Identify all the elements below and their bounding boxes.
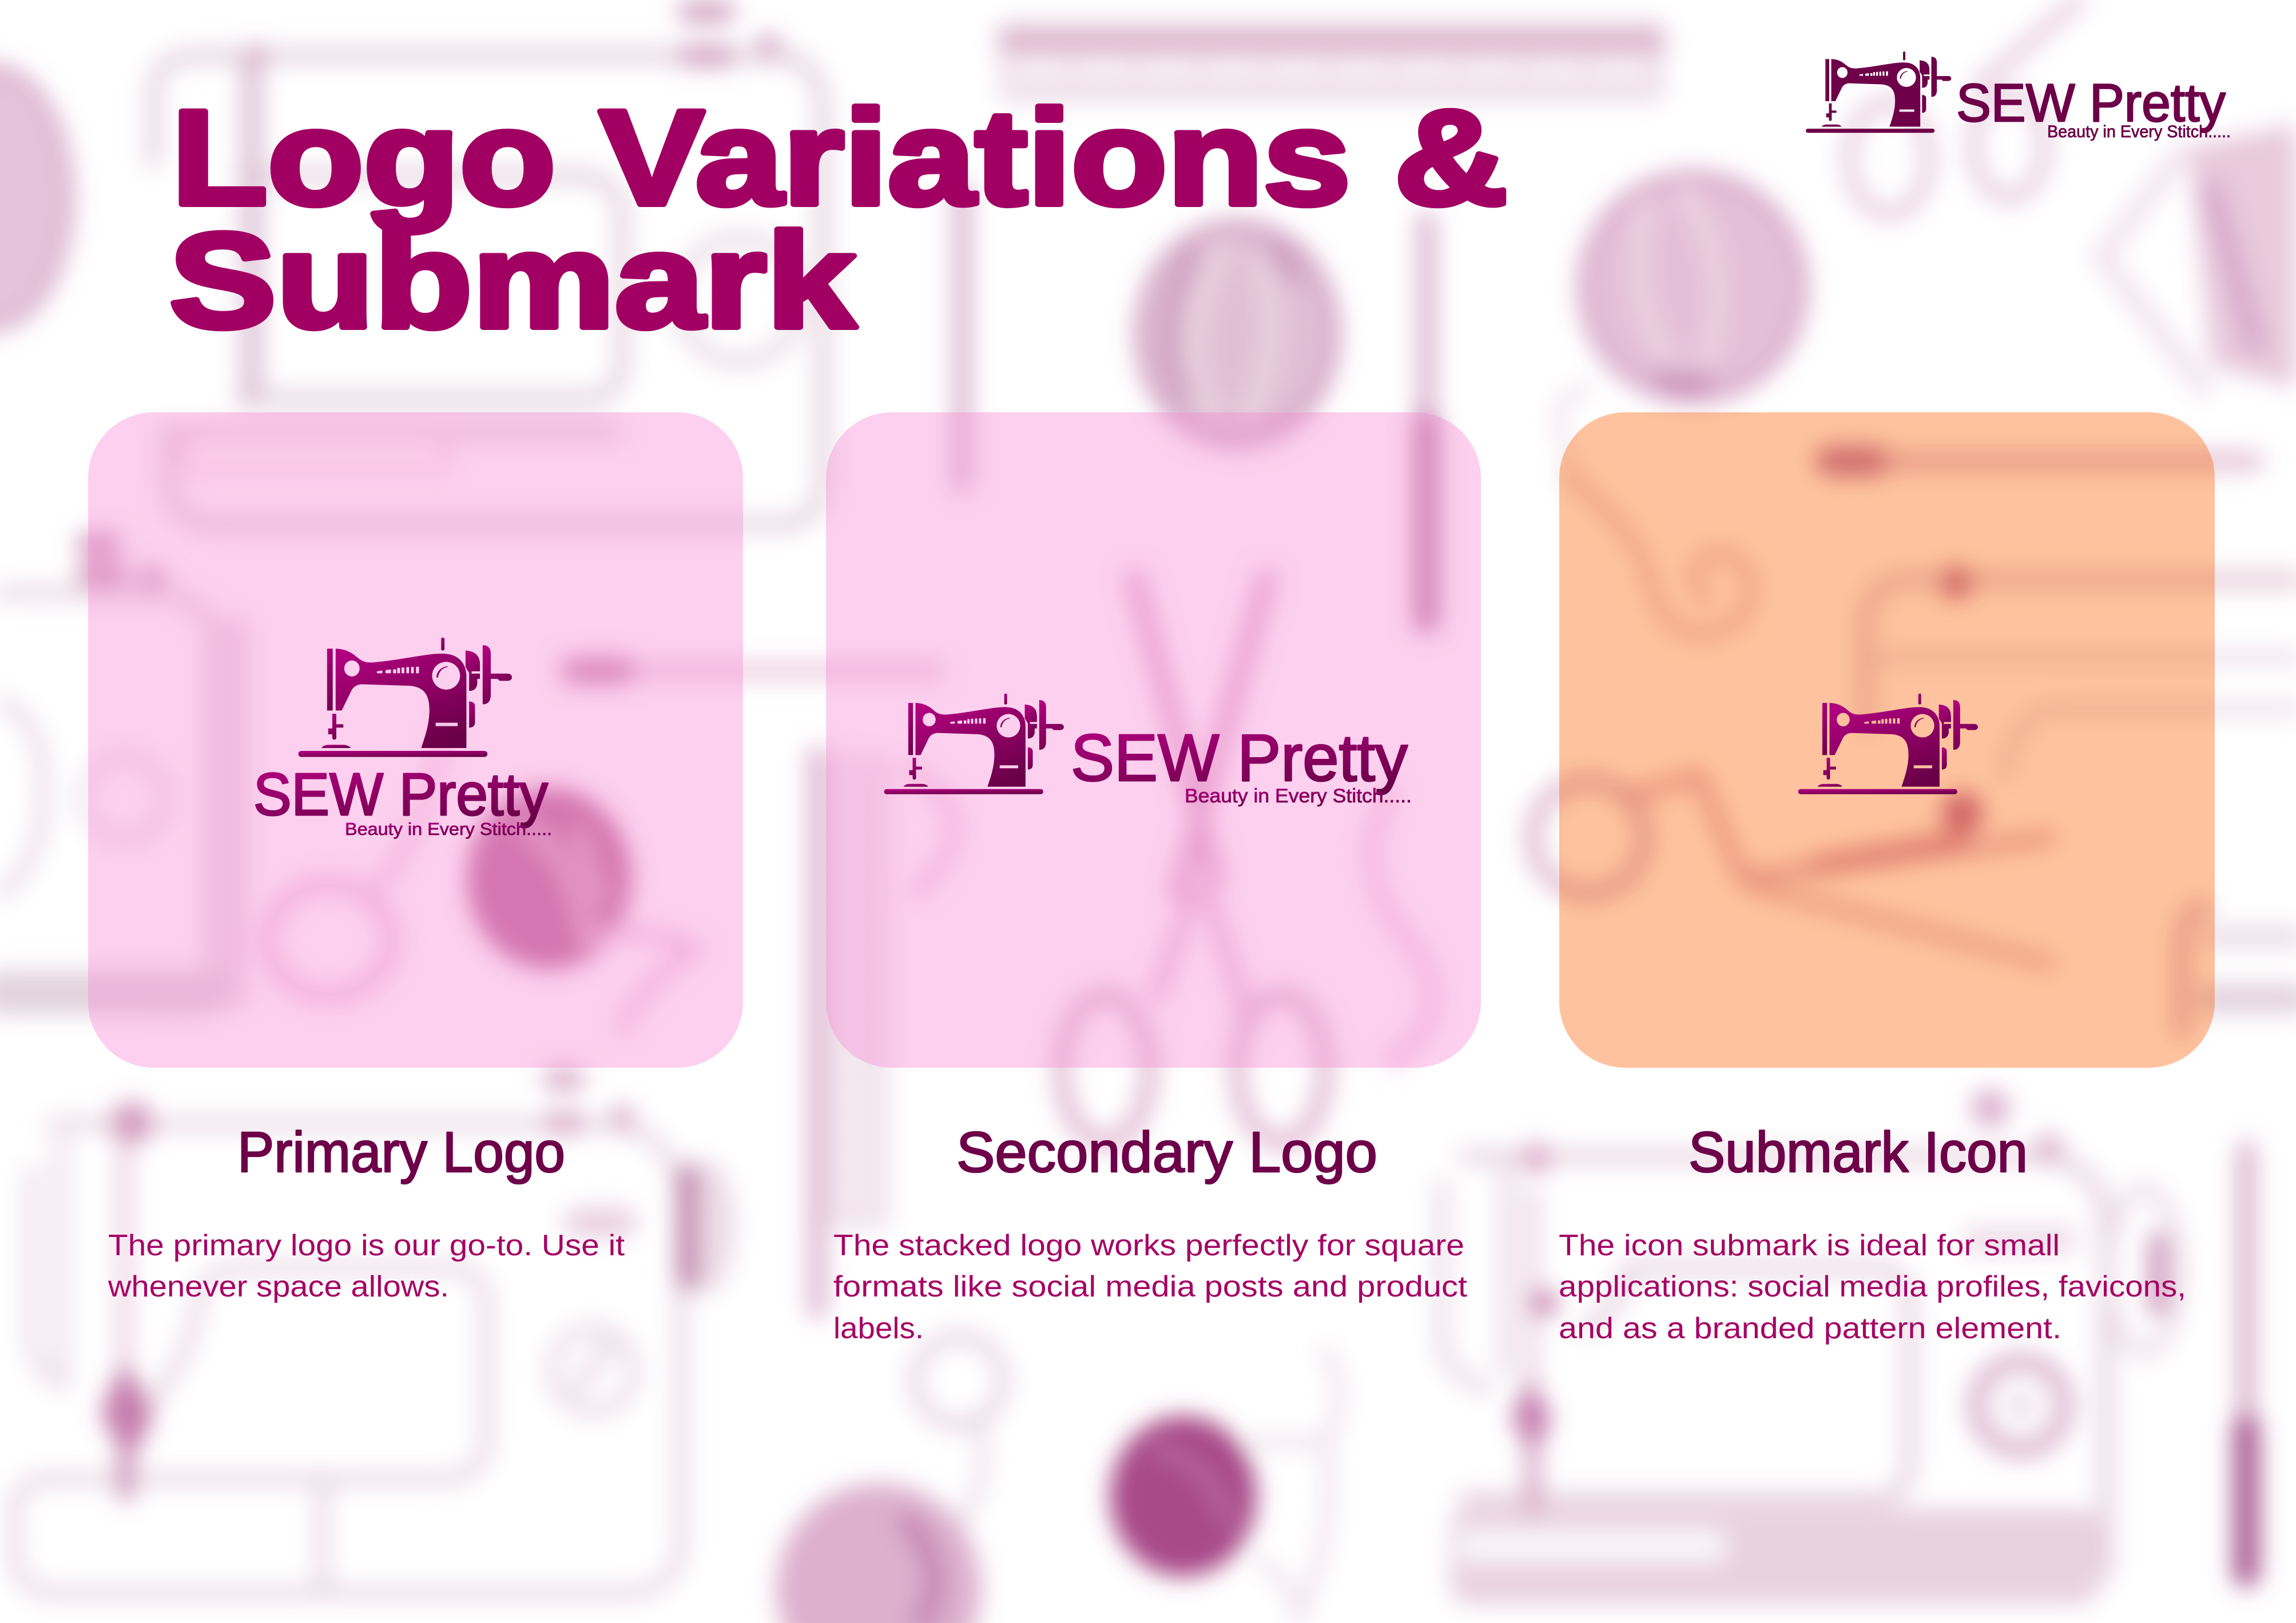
- title: Submark: [169, 205, 856, 356]
- icon: sewing machine submark: [1798, 694, 1978, 794]
- scissors top-right: [1849, 0, 2079, 214]
- heading: submark icon: Submark Icon: [1689, 1120, 2028, 1184]
- header logo wordmark: SEW Pretty: [1956, 73, 2226, 133]
- bottom-left sewing machine: [15, 1079, 735, 1593]
- panel: submark icon card: [1559, 412, 2215, 1068]
- needles: [571, 190, 2255, 1574]
- centre bottom yarn and thread: [776, 1336, 1340, 1623]
- top-left sewing machine: [154, 11, 823, 524]
- secondary logo tagline: Beauty in Every Stitch.....: [1185, 785, 1412, 807]
- panel: secondary logo card: [826, 412, 1481, 1068]
- card 2 scissors and ruler: [808, 578, 1432, 1310]
- secondary logo wordmark: SEW Pretty: [1071, 721, 1408, 795]
- card 1 motifs: [0, 544, 696, 1028]
- secondary logo: [884, 694, 1412, 807]
- text: submark icon description: [1559, 1229, 2186, 1345]
- thread spool top-right: [2102, 125, 2296, 388]
- text: submark icon description: and as a branded pattern element.: [1559, 1312, 2061, 1345]
- title: [169, 82, 1508, 356]
- primary logo: [253, 638, 552, 839]
- text: primary logo description: whenever space allows.: [108, 1270, 449, 1303]
- heading: secondary logo: Secondary Logo: [956, 1120, 1377, 1184]
- header logo: [1806, 51, 2231, 141]
- icon: sewing machine (primary): [299, 638, 512, 757]
- icon: sewing machine (header): [1806, 51, 1951, 133]
- text: submark icon description: The icon submark is ideal for small: [1559, 1229, 2060, 1262]
- text: secondary logo description: labels.: [833, 1312, 924, 1345]
- yarn balls upper: [0, 69, 1802, 468]
- primary logo wordmark: SEW Pretty: [253, 761, 548, 828]
- ruler: [999, 21, 1665, 102]
- panel: primary logo card: [88, 412, 743, 1068]
- bottom-right sewing machine: [1443, 1089, 2179, 1605]
- card 3 motifs: [1533, 476, 2296, 1032]
- title: Logo Variations &: [172, 82, 1508, 233]
- heading: primary logo: Primary Logo: [237, 1120, 565, 1184]
- text: primary logo description: [108, 1229, 625, 1303]
- text: primary logo description: The primary logo is our go-to. Use it: [108, 1229, 625, 1262]
- text: submark icon description: applications: social media profiles, favicons,: [1559, 1270, 2186, 1303]
- primary logo tagline: Beauty in Every Stitch.....: [345, 819, 552, 839]
- header logo tagline: Beauty in Every Stitch.....: [2047, 122, 2231, 141]
- text: secondary logo description: formats like social media posts and product: [833, 1270, 1468, 1303]
- text: secondary logo description: The stacked logo works perfectly for square: [833, 1229, 1464, 1262]
- text: secondary logo description: [833, 1229, 1468, 1345]
- icon: sewing machine (secondary): [884, 694, 1064, 794]
